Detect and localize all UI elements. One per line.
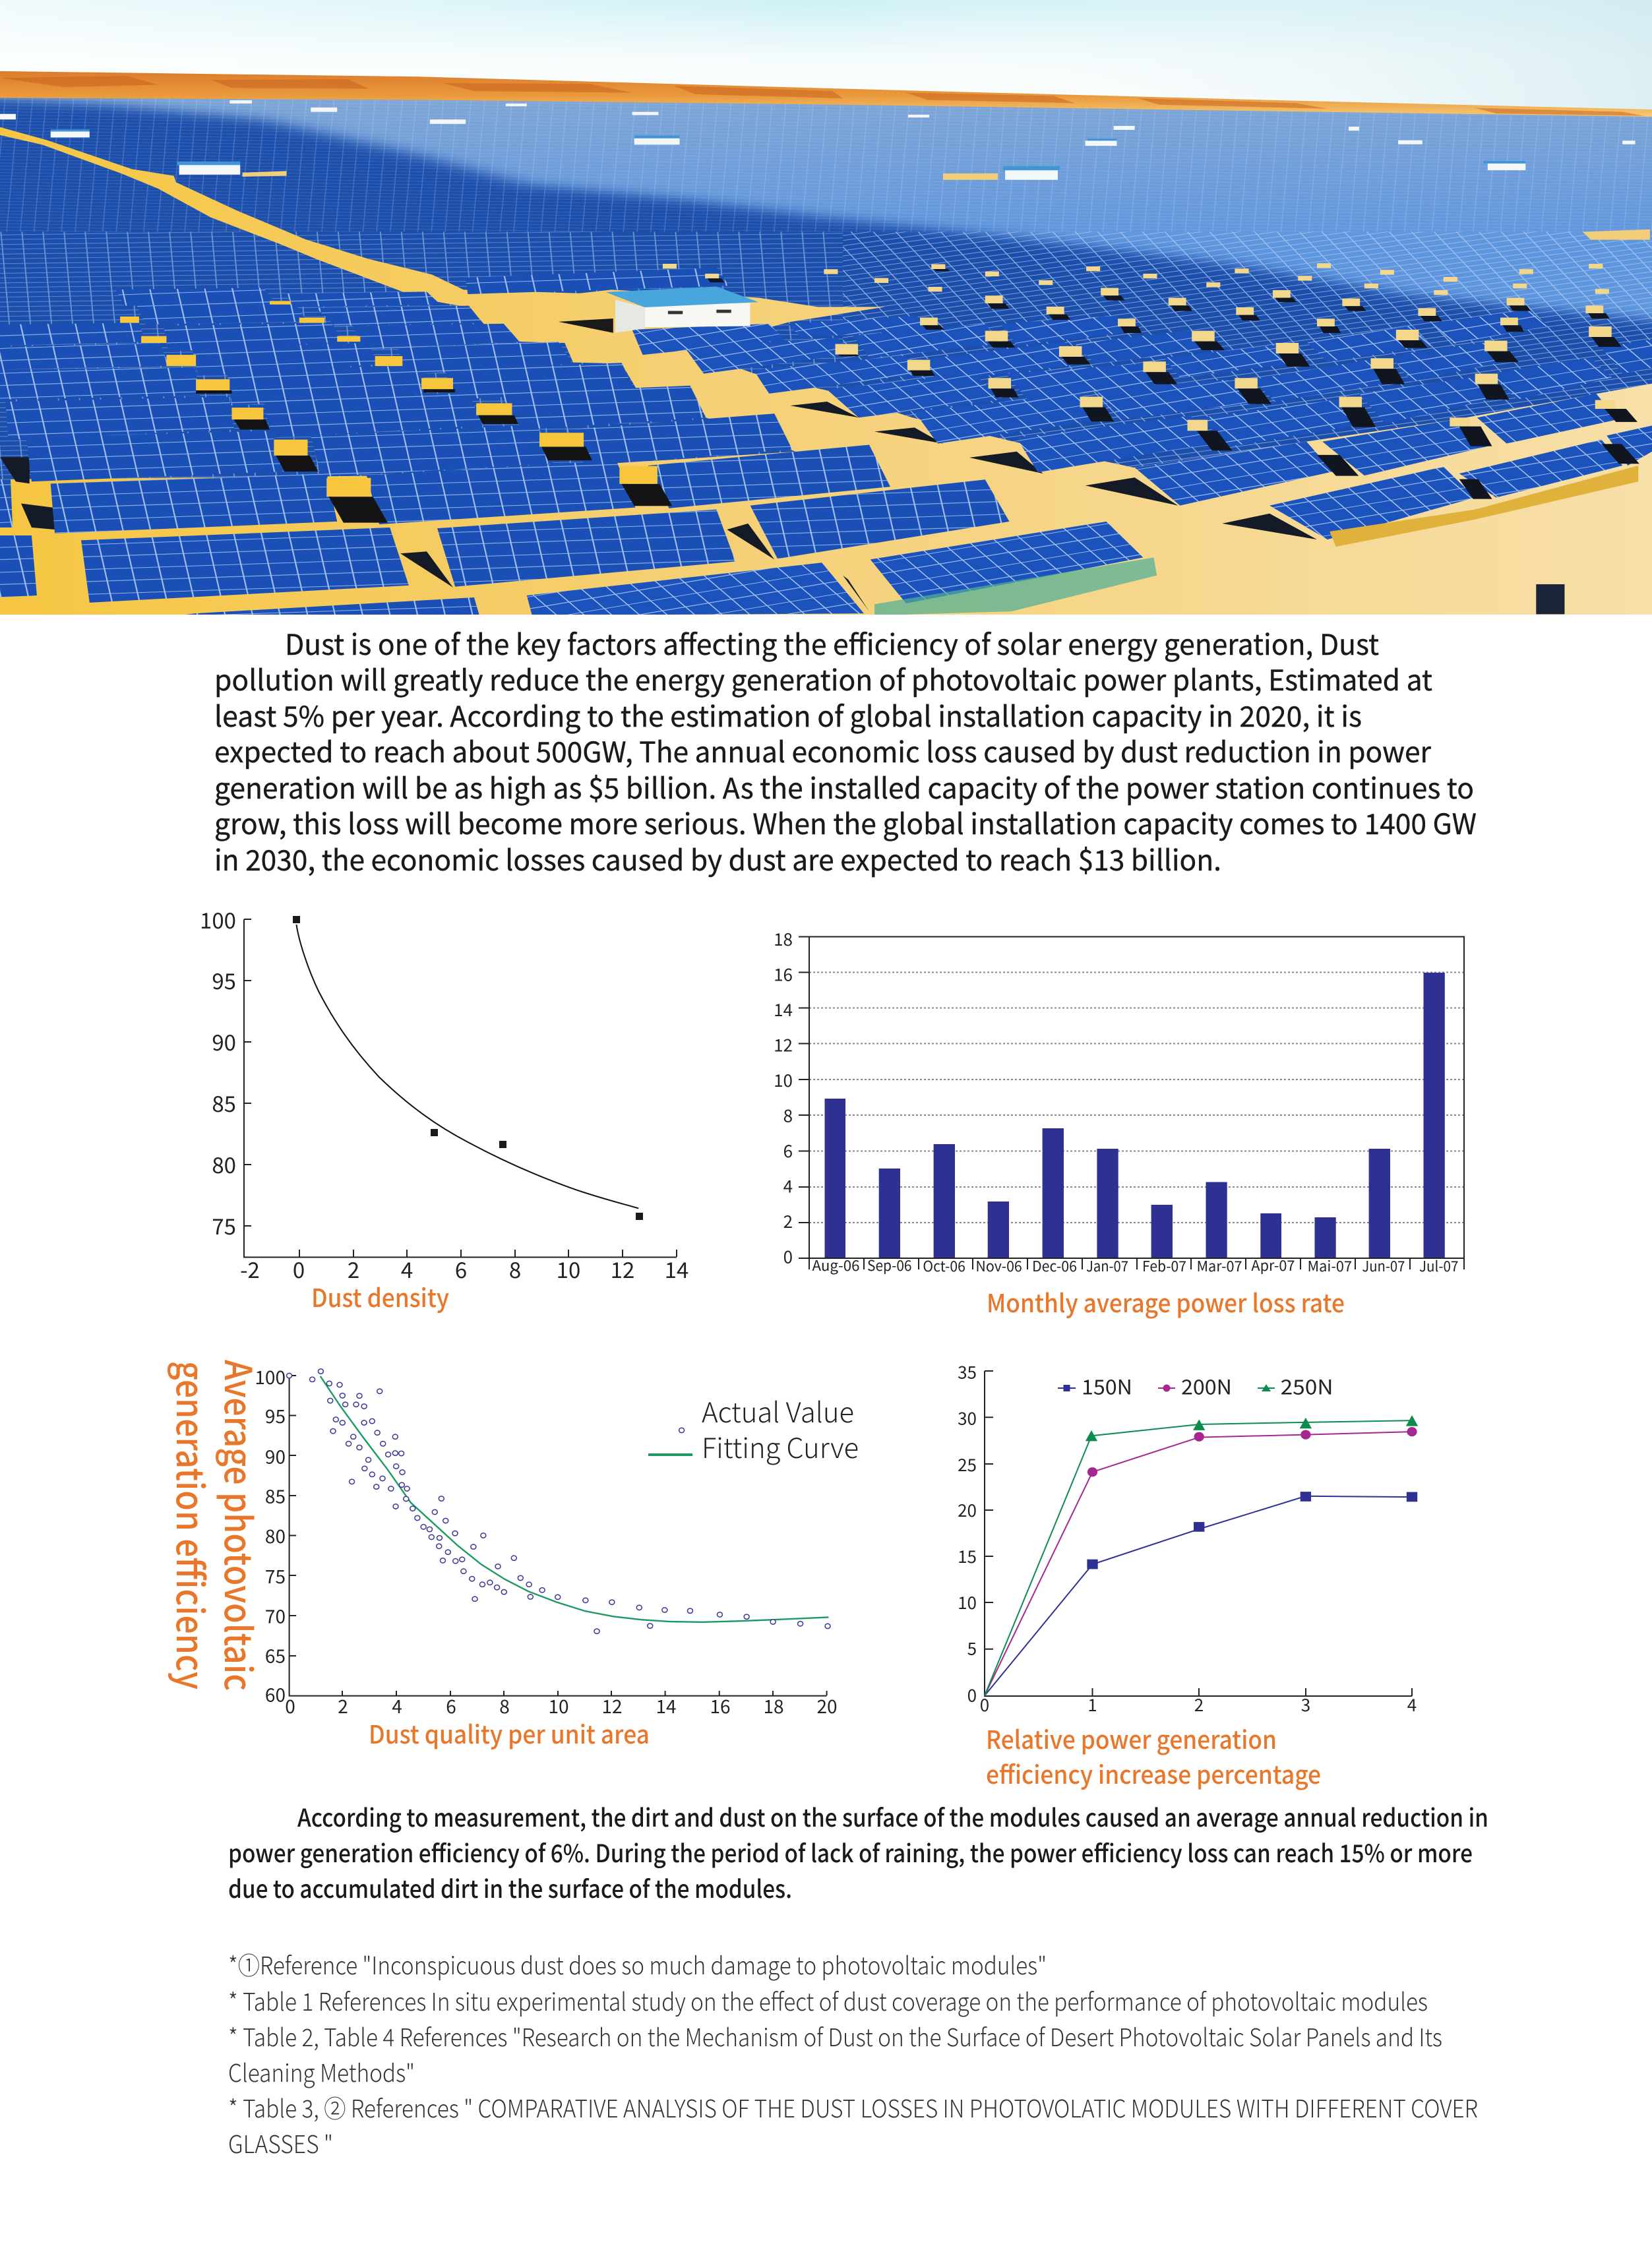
x axis labels: 12 bbox=[601, 1693, 623, 1719]
chart title: Dust quality per unit area bbox=[369, 1715, 650, 1751]
legend: Fitting Curve bbox=[702, 1426, 859, 1467]
y axis labels: 25 bbox=[958, 1452, 977, 1476]
black sign bbox=[1536, 584, 1564, 614]
y axis labels: 18 bbox=[774, 927, 793, 951]
month labels: Dec-06 bbox=[1032, 1255, 1077, 1276]
y axis labels: 80 bbox=[265, 1523, 286, 1549]
x axis labels: 0 bbox=[285, 1693, 295, 1719]
field texture: left rows bbox=[0, 232, 843, 480]
month labels bbox=[812, 1254, 1458, 1276]
y axis labels: 100 bbox=[200, 903, 236, 935]
month labels: Mar-07 bbox=[1196, 1255, 1242, 1276]
foreground panels, right group bbox=[527, 310, 1652, 615]
legend: 250N bbox=[1258, 1370, 1333, 1401]
posts and shadows, right field bbox=[663, 263, 1639, 499]
fitted curve bbox=[296, 925, 638, 1208]
intro paragraph bbox=[214, 623, 1477, 879]
y axis labels: 0 bbox=[967, 1683, 977, 1707]
chart title: efficiency increase percentage bbox=[986, 1755, 1321, 1791]
solar field background bbox=[0, 98, 1652, 480]
x axis labels: 0 bbox=[980, 1692, 989, 1717]
intro paragraph: grow, this loss will become more serious. When the global installation capacity comes to 1400 GW bbox=[214, 802, 1477, 843]
y axis labels: 16 bbox=[774, 961, 793, 987]
y axis labels: 15 bbox=[958, 1544, 977, 1568]
x axis labels: 6 bbox=[446, 1693, 456, 1719]
grid lines bbox=[809, 972, 1464, 1223]
sand patches in far field bbox=[242, 171, 1650, 240]
intro paragraph: generation will be as high as $5 billion. As the installed capacity of the power station continues to bbox=[214, 766, 1474, 807]
panel shadows bbox=[0, 402, 1317, 611]
frame and ticks bbox=[799, 936, 1464, 1269]
fitting curve and scatter points bbox=[287, 1369, 830, 1633]
intro paragraph: pollution will greatly reduce the energy generation of photovoltaic power plants, Estimated at bbox=[214, 658, 1432, 699]
x axis labels: 3 bbox=[1301, 1692, 1310, 1717]
y axis labels: 80 bbox=[212, 1148, 236, 1180]
x axis labels: 4 bbox=[392, 1693, 402, 1719]
y axis labels: 2 bbox=[783, 1209, 793, 1233]
yellow fencing bbox=[1330, 466, 1638, 547]
measurement paragraph: due to accumulated dirt in the surface of the modules. bbox=[228, 1870, 792, 1905]
x axis labels: 4 bbox=[401, 1253, 413, 1285]
series: 200N bbox=[985, 1427, 1417, 1696]
x axis labels: 10 bbox=[557, 1253, 580, 1285]
chart: relative power generation efficiency bbox=[958, 1359, 1418, 1791]
rotated y axis title bbox=[166, 1360, 267, 1691]
x axis labels: 8 bbox=[499, 1693, 510, 1719]
y axis labels: 12 bbox=[774, 1033, 793, 1056]
desert horizon band bbox=[0, 71, 1652, 120]
y axis labels: 8 bbox=[783, 1103, 793, 1128]
x axis labels bbox=[285, 1693, 838, 1719]
y axis labels bbox=[200, 903, 236, 1241]
main white building bbox=[606, 287, 758, 333]
legend: 200N: 200N bbox=[1181, 1370, 1232, 1401]
intro paragraph: least 5% per year. According to the estimation of global installation capacity in 2020, it is bbox=[214, 694, 1362, 735]
dark shadows between left panels bbox=[196, 389, 672, 523]
x axis labels: 14 bbox=[656, 1693, 677, 1719]
month labels: Oct-06 bbox=[923, 1255, 965, 1276]
blue roofs of small buildings bbox=[51, 129, 1525, 170]
chart title: Dust density bbox=[311, 1278, 449, 1314]
month labels: Aug-06 bbox=[812, 1254, 860, 1275]
green safety net bbox=[874, 557, 1157, 615]
x axis labels: 0 bbox=[293, 1253, 305, 1285]
y axis labels: 5 bbox=[967, 1636, 977, 1660]
data points bbox=[293, 916, 643, 1220]
sand gaps between left panels bbox=[120, 301, 658, 497]
chart: dust density bbox=[200, 903, 688, 1314]
rotated y axis title: generation efficiency bbox=[166, 1361, 219, 1689]
month labels: Apr-07 bbox=[1251, 1254, 1295, 1275]
x axis labels: 2 bbox=[338, 1693, 348, 1719]
references: GLASSES " bbox=[228, 2125, 333, 2160]
legend: 250N: 250N bbox=[1281, 1370, 1333, 1401]
y axis labels: 90 bbox=[265, 1443, 286, 1469]
series: 250N bbox=[985, 1415, 1418, 1696]
measurement paragraph: power generation efficiency of 6%. During the period of lack of raining, the power efficiency loss can reach 15% or more bbox=[228, 1834, 1473, 1870]
intro paragraph: Dust is one of the key factors affecting the efficiency of solar energy generation, Dust bbox=[285, 623, 1379, 663]
legend: 150N: 150N bbox=[1082, 1370, 1132, 1401]
references: Cleaning Methods" bbox=[228, 2053, 415, 2089]
x axis labels: -2 bbox=[240, 1253, 260, 1285]
x axis labels: 20 bbox=[816, 1693, 838, 1719]
y axis labels bbox=[255, 1364, 286, 1708]
y axis labels: 10 bbox=[774, 1068, 793, 1092]
y axis labels: 14 bbox=[774, 997, 793, 1021]
x axis labels: 10 bbox=[548, 1693, 569, 1719]
x axis labels: 14 bbox=[665, 1253, 688, 1285]
x axis labels: 16 bbox=[710, 1693, 731, 1719]
y axis labels: 6 bbox=[783, 1138, 793, 1163]
references bbox=[228, 1946, 1478, 2160]
month labels: Mai-07 bbox=[1307, 1255, 1352, 1276]
y axis labels: 35 bbox=[958, 1359, 977, 1383]
axes and ticks bbox=[985, 1371, 1412, 1696]
month labels: Jun-07 bbox=[1362, 1255, 1405, 1276]
photo: solar farm in the desert bbox=[0, 0, 1652, 640]
references: * Table 3, ② References " COMPARATIVE ANALYSIS OF THE DUST LOSSES IN PHOTOVOLATIC MODULES WITH DIFFERENT COVER bbox=[228, 2089, 1478, 2125]
y axis labels: 100 bbox=[255, 1364, 286, 1390]
references: * Table 1 References In situ experimental study on the effect of dust coverage on the performance of photovoltaic modules bbox=[228, 1982, 1428, 2018]
chart title: Monthly average power loss rate bbox=[987, 1283, 1345, 1320]
y axis labels bbox=[958, 1359, 977, 1707]
references: *①Reference "Inconspicuous dust does so much damage to photovoltaic modules" bbox=[228, 1946, 1047, 1982]
x axis labels: 6 bbox=[455, 1253, 467, 1285]
y axis labels: 75 bbox=[265, 1563, 286, 1589]
x axis labels: 2 bbox=[348, 1253, 359, 1285]
month labels: Feb-07 bbox=[1142, 1255, 1186, 1276]
legend: 150N bbox=[1058, 1370, 1132, 1401]
small white buildings bbox=[0, 100, 1635, 180]
month labels: Jan-07 bbox=[1086, 1255, 1128, 1276]
x axis labels: 12 bbox=[611, 1253, 634, 1285]
y axis labels: 65 bbox=[265, 1642, 286, 1668]
series: 150N bbox=[985, 1492, 1417, 1696]
axes and ticks bbox=[290, 1376, 827, 1696]
legend: 200N bbox=[1158, 1370, 1232, 1401]
x axis labels bbox=[980, 1692, 1417, 1717]
measurement paragraph bbox=[228, 1798, 1488, 1905]
y axis labels: 85 bbox=[212, 1087, 236, 1118]
bars bbox=[824, 973, 1445, 1258]
intro paragraph: expected to reach about 500GW, The annual economic loss caused by dust reduction in power bbox=[214, 730, 1431, 771]
sand tops of posts bbox=[663, 263, 1615, 431]
field texture: right rows bbox=[843, 231, 1652, 471]
x axis labels: 1 bbox=[1087, 1692, 1097, 1717]
axes and ticks bbox=[244, 919, 677, 1257]
y axis labels: 75 bbox=[212, 1209, 236, 1241]
x axis labels bbox=[240, 1253, 688, 1285]
chart: dust quality versus photovoltaic efficiency bbox=[166, 1360, 859, 1751]
foreground panels, left group bbox=[0, 268, 1010, 615]
legend bbox=[1058, 1370, 1333, 1401]
x axis labels: 8 bbox=[509, 1253, 521, 1285]
darker foreground of the field bbox=[0, 98, 1652, 480]
y axis labels: 60 bbox=[265, 1682, 286, 1708]
references: * Table 2, Table 4 References "Research on the Mechanism of Dust on the Surface of Desert Photovoltaic Solar Panels and Its bbox=[228, 2018, 1442, 2053]
y axis labels: 90 bbox=[212, 1025, 236, 1057]
chart title bbox=[986, 1720, 1321, 1791]
y axis labels: 85 bbox=[265, 1482, 286, 1509]
y axis labels: 4 bbox=[783, 1174, 793, 1198]
measurement paragraph: According to measurement, the dirt and dust on the surface of the modules caused an average annual reduction in bbox=[297, 1798, 1488, 1834]
month labels: Nov-06 bbox=[975, 1255, 1022, 1276]
x axis labels: 18 bbox=[763, 1693, 784, 1719]
sky bbox=[0, 0, 1652, 120]
rotated y axis title: Average photovoltaic bbox=[214, 1360, 267, 1691]
x axis labels: 4 bbox=[1407, 1692, 1417, 1717]
y axis labels bbox=[774, 927, 793, 1269]
y axis labels: 70 bbox=[265, 1602, 286, 1629]
legend: Actual Value bbox=[702, 1391, 854, 1431]
y axis labels: 0 bbox=[783, 1244, 793, 1269]
dark shadows of posts bbox=[708, 269, 1639, 499]
y axis labels: 95 bbox=[265, 1403, 286, 1429]
field texture: distant rows bbox=[0, 96, 1652, 231]
series lines and markers bbox=[985, 1415, 1418, 1696]
chart: monthly average power loss rate bbox=[774, 927, 1464, 1320]
month labels: Jul-07 bbox=[1419, 1255, 1458, 1276]
y axis labels: 30 bbox=[958, 1405, 977, 1430]
chart title: Relative power generation bbox=[986, 1720, 1277, 1756]
building shadow bbox=[559, 319, 613, 333]
y axis labels: 95 bbox=[212, 964, 236, 996]
y axis labels: 20 bbox=[958, 1498, 977, 1522]
sand road and foreground ground bbox=[0, 127, 1652, 615]
intro paragraph: in 2030, the economic losses caused by dust are expected to reach $13 billion. bbox=[214, 838, 1221, 879]
x axis labels: 2 bbox=[1194, 1692, 1204, 1717]
month labels: Sep-06 bbox=[867, 1254, 911, 1275]
y axis labels: 10 bbox=[958, 1590, 977, 1614]
legend bbox=[648, 1391, 859, 1467]
